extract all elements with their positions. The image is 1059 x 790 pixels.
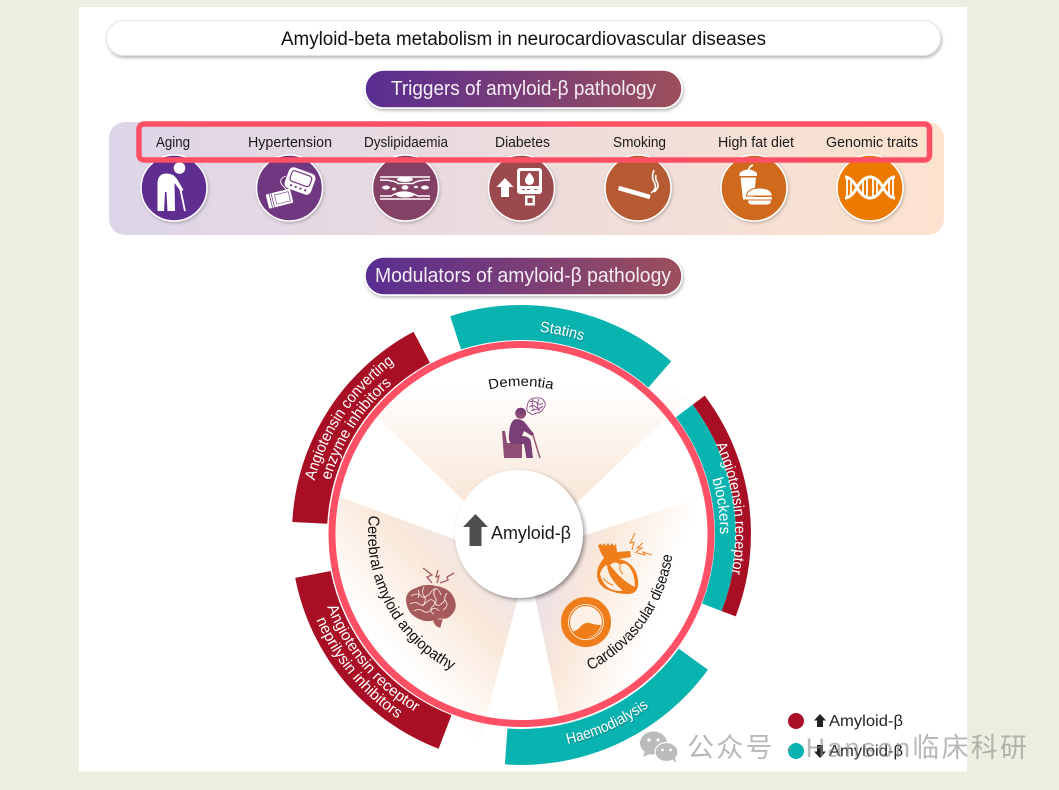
band: angiotensin receptor blockers: blockers: [712, 477, 730, 534]
band: angiotensin receptor blockers: Angiotensin receptor: [716, 444, 744, 575]
icon: seated person with dementia: [502, 398, 545, 458]
band: angiotensin converting enzyme inhibitors: enzyme inhibitors: [323, 379, 391, 479]
label: dyslipidaemia: Dyslipidaemia: [364, 134, 449, 151]
watermark text: 公众号 · Hanson临床科研: [687, 733, 1027, 763]
title: [106, 20, 940, 56]
label: cerebral amyloid angiopathy: Cerebral amyloid angiopathy: [368, 516, 456, 671]
label: diabetes: Diabetes: [495, 134, 550, 151]
band: angiotensin receptor neprilysin inhibitors: [295, 571, 452, 749]
band: angiotensin converting enzyme inhibitors: [292, 332, 430, 524]
label: high fat diet: High fat diet: [718, 134, 795, 151]
icon: up arrow: [463, 514, 488, 546]
centre: amyloid-beta: [455, 470, 583, 598]
band: statins: Statins: [540, 322, 585, 342]
band: angiotensin receptor neprilysin inhibitors: Angiotensin receptor: [327, 606, 420, 711]
band: haemodialysis: Haemodialysis: [566, 702, 649, 745]
label: smoking: Smoking: [613, 134, 666, 151]
band: angiotensin receptor neprilysin inhibitors: neprilysin inhibitors: [316, 617, 401, 718]
band: statins: [450, 305, 672, 388]
icon: heart with lightning: [597, 533, 652, 594]
label: hypertension: Hypertension: [248, 134, 332, 151]
label: amyloid-beta: Amyloid-β: [491, 522, 571, 543]
icon: high fat diet: [721, 155, 787, 221]
icon: dyslipidaemia artery: [372, 155, 438, 221]
band: angiotensin receptor blockers: [676, 396, 751, 616]
label: aging: Aging: [156, 134, 190, 151]
title: Amyloid-beta metabolism in neurocardiovascular diseases: [281, 29, 766, 50]
wedge: cardiovascular disease: [535, 497, 715, 745]
watermark: [640, 732, 1027, 763]
legend: decreases amyloid-beta: Amyloid-β: [829, 743, 903, 760]
chart: modulators wheel: [292, 305, 751, 765]
band: haemodialysis: [504, 648, 708, 765]
icon: smoking cigarette: [605, 155, 671, 221]
icon: aging: [141, 155, 207, 221]
label: dementia: Dementia: [488, 378, 553, 390]
panel: triggers band: [109, 122, 944, 235]
icon: diabetes glucose meter: [488, 155, 554, 221]
heading: triggers of amyloid-beta pathology: [365, 70, 682, 108]
icon: vessel cross-section: [564, 600, 608, 644]
legend: [788, 713, 903, 760]
heading: modulators of amyloid-beta pathology: [365, 257, 682, 295]
legend: increases amyloid-beta: Amyloid-β: [829, 713, 903, 730]
red ring: [332, 344, 711, 724]
band: angiotensin converting enzyme inhibitors: Angiotensin converting: [306, 356, 394, 481]
icon: blood pressure monitor: [256, 155, 322, 221]
wedge: cerebral amyloid angiopathy: [330, 497, 520, 740]
highlight frame around trigger labels: [139, 124, 930, 160]
heading: triggers of amyloid-beta pathology: Triggers of amyloid-β pathology: [391, 77, 657, 100]
wedge: dementia: [375, 372, 687, 556]
icon: genomic traits DNA: [837, 155, 903, 221]
heading: modulators of amyloid-beta pathology: Modulators of amyloid-β pathology: [375, 264, 672, 287]
label: cardiovascular disease: Cardiovascular disease: [588, 555, 672, 668]
icon: wechat: [640, 732, 678, 763]
icon: brain with lightning: [406, 568, 456, 628]
label: genomic traits: Genomic traits: [826, 134, 918, 151]
